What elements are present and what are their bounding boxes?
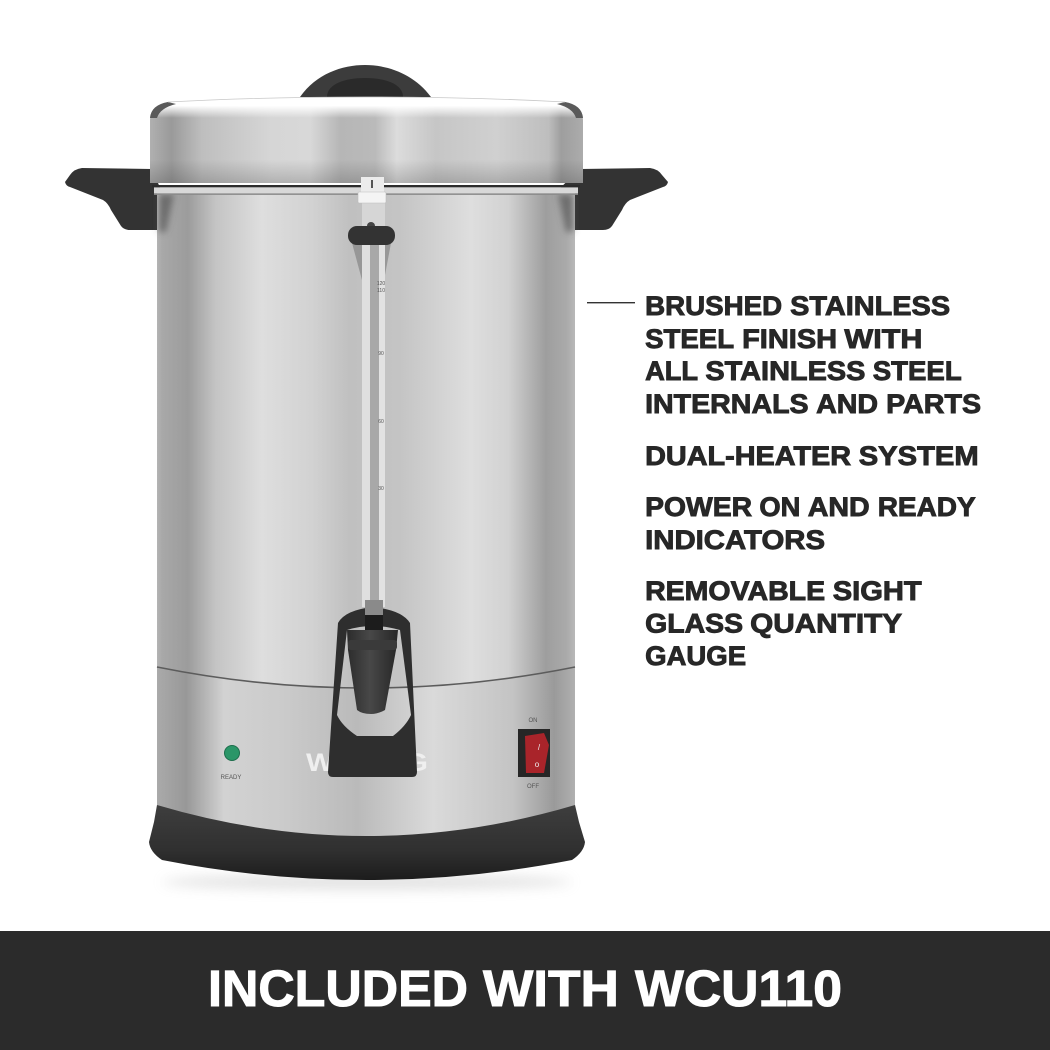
gauge scale: 90: [378, 351, 384, 357]
base seam: [157, 667, 575, 688]
lid: [150, 97, 583, 183]
feature: dual heater: SYSTEM: [859, 441, 979, 471]
brand logo: WARING: [306, 749, 428, 777]
feature: indicators: [645, 492, 976, 555]
feature: stainless steel finish: BRUSHED: [645, 291, 782, 321]
power switch: o: [535, 760, 540, 769]
feature: sight glass: QUANTITY: [750, 608, 902, 638]
gauge scale: 120: [377, 281, 385, 287]
feature: dual heater: DUAL-HEATER: [645, 441, 851, 471]
foot shadow: [162, 874, 572, 890]
lid rim band: [152, 185, 580, 195]
feature: stainless steel finish: [645, 291, 981, 419]
feature: stainless steel finish: ALL: [645, 356, 698, 386]
power switch: [518, 718, 550, 790]
right handle: [558, 168, 668, 230]
feature: indicators: POWER: [645, 492, 752, 522]
gauge scale: 60: [378, 419, 384, 425]
power switch: OFF: [527, 784, 539, 790]
feature: sight glass: SIGHT: [833, 576, 922, 606]
left handle: [65, 168, 161, 230]
feature: sight glass: GAUGE: [645, 641, 746, 671]
lid knob: [300, 65, 431, 97]
ready indicator: [221, 746, 241, 781]
banner title: WCU110: [635, 960, 842, 1017]
feature: indicators: INDICATORS: [645, 525, 825, 555]
gauge knob: [348, 222, 395, 280]
base foot: [149, 805, 585, 880]
feature: stainless steel finish: STEEL: [645, 324, 734, 354]
power switch: ON: [528, 718, 538, 724]
gauge scale: 110: [377, 288, 385, 294]
callout line: [587, 302, 635, 303]
feature: indicators: READY: [878, 492, 976, 522]
feature: stainless steel finish: WITH: [844, 324, 922, 354]
spout tap: [347, 600, 398, 714]
gauge scale: 30: [378, 486, 384, 492]
feature: stainless steel finish: STEEL: [873, 356, 962, 386]
feature: stainless steel finish: FINISH: [742, 324, 837, 354]
power switch: /: [538, 743, 541, 752]
base band: [157, 668, 575, 840]
feature: stainless steel finish: INTERNALS: [645, 389, 809, 419]
bottom banner: [0, 931, 1050, 1050]
feature: stainless steel finish: AND: [816, 389, 878, 419]
gauge scale: [377, 281, 385, 492]
coffee urn product photo: [65, 65, 668, 890]
feature: sight glass: GLASS: [645, 608, 743, 638]
feature: stainless steel finish: STAINLESS: [790, 291, 950, 321]
sight glass gauge: [348, 177, 395, 607]
feature: indicators: ON: [759, 492, 800, 522]
handle shadows on body: [159, 194, 573, 232]
banner title: INCLUDED: [208, 960, 468, 1017]
feature: sight glass: REMOVABLE: [645, 576, 825, 606]
feature: dual heater: [645, 441, 979, 471]
gauge top cap: [358, 177, 386, 203]
body: [157, 188, 575, 698]
spout bracket: [328, 607, 417, 777]
ready indicator: READY: [221, 775, 241, 781]
feature list: [645, 291, 981, 671]
feature: sight glass: [645, 576, 922, 671]
feature: indicators: AND: [808, 492, 870, 522]
banner title: [208, 960, 842, 1017]
feature: stainless steel finish: STAINLESS: [705, 356, 865, 386]
banner title: WITH: [483, 960, 619, 1017]
feature: stainless steel finish: PARTS: [886, 389, 981, 419]
